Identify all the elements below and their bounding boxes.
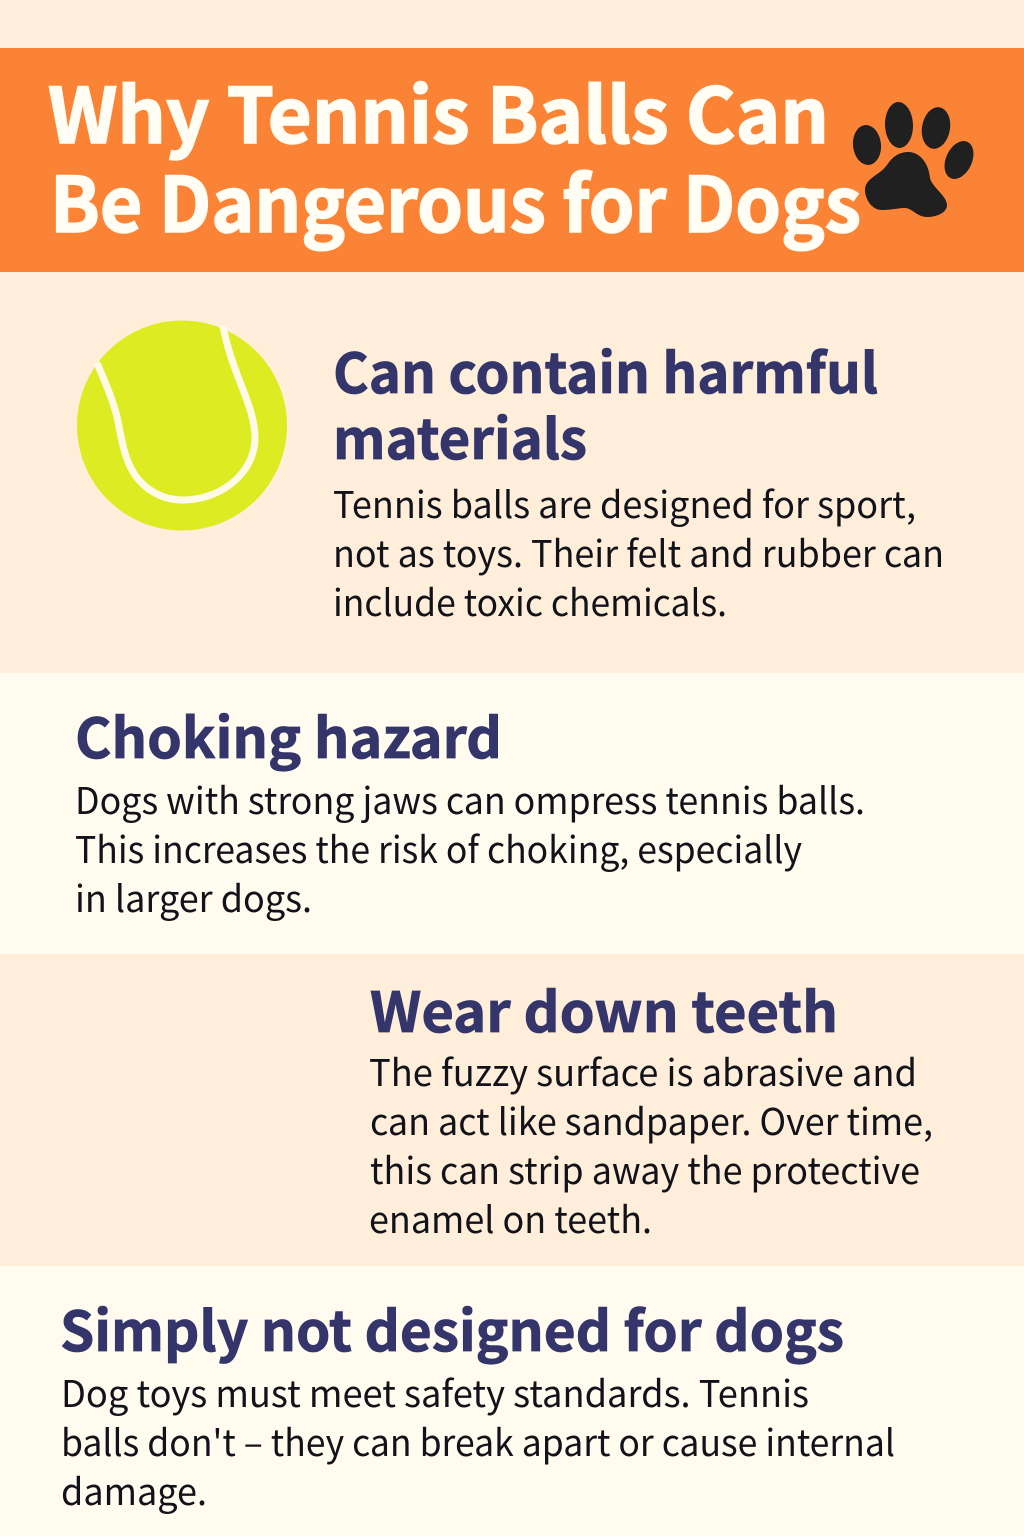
text block: in larger dogs. — [75, 870, 312, 923]
title: Be Dangerous for Dogs — [50, 144, 861, 254]
panel: wear down teeth — [0, 954, 1024, 1266]
text block: Tennis balls are designed for sport, — [333, 476, 916, 529]
text block: include toxic chemicals. — [333, 574, 727, 627]
panel: choking hazard — [0, 673, 1024, 954]
text block — [75, 772, 865, 923]
text block — [369, 1044, 933, 1244]
text block: can act like sandpaper. Over time, — [370, 1093, 933, 1146]
text block — [333, 476, 944, 627]
heading: materials — [333, 395, 587, 475]
text block: balls don't – they can break apart or cause internal — [61, 1414, 895, 1467]
text block: The fuzzy surface is abrasive and — [369, 1044, 917, 1097]
text block: Dog toys must meet safety standards. Tennis — [61, 1365, 809, 1418]
text block: not as toys. Their felt and rubber can — [333, 525, 944, 578]
heading: Wear down teeth — [370, 968, 838, 1048]
text block — [61, 1365, 895, 1516]
icon: tennis ball — [77, 320, 287, 530]
title: Why Tennis Balls Can — [48, 55, 829, 165]
heading: Can contain harmful — [333, 329, 878, 409]
heading: Simply not designed for dogs — [60, 1287, 844, 1367]
panel: header banner — [0, 48, 1024, 272]
text block: This increases the risk of choking, especially — [75, 821, 802, 874]
panel: simply not designed for dogs — [0, 1266, 1024, 1536]
panel: can contain harmful materials — [0, 272, 1024, 673]
text block: enamel on teeth. — [369, 1191, 652, 1244]
heading: Choking hazard — [75, 694, 502, 774]
text block: Dogs with strong jaws can ompress tennis balls. — [75, 772, 865, 825]
text block: this can strip away the protective — [370, 1142, 920, 1195]
heading — [333, 329, 878, 475]
text block: damage. — [61, 1463, 207, 1516]
title — [48, 55, 861, 254]
icon: paw print — [851, 102, 979, 217]
